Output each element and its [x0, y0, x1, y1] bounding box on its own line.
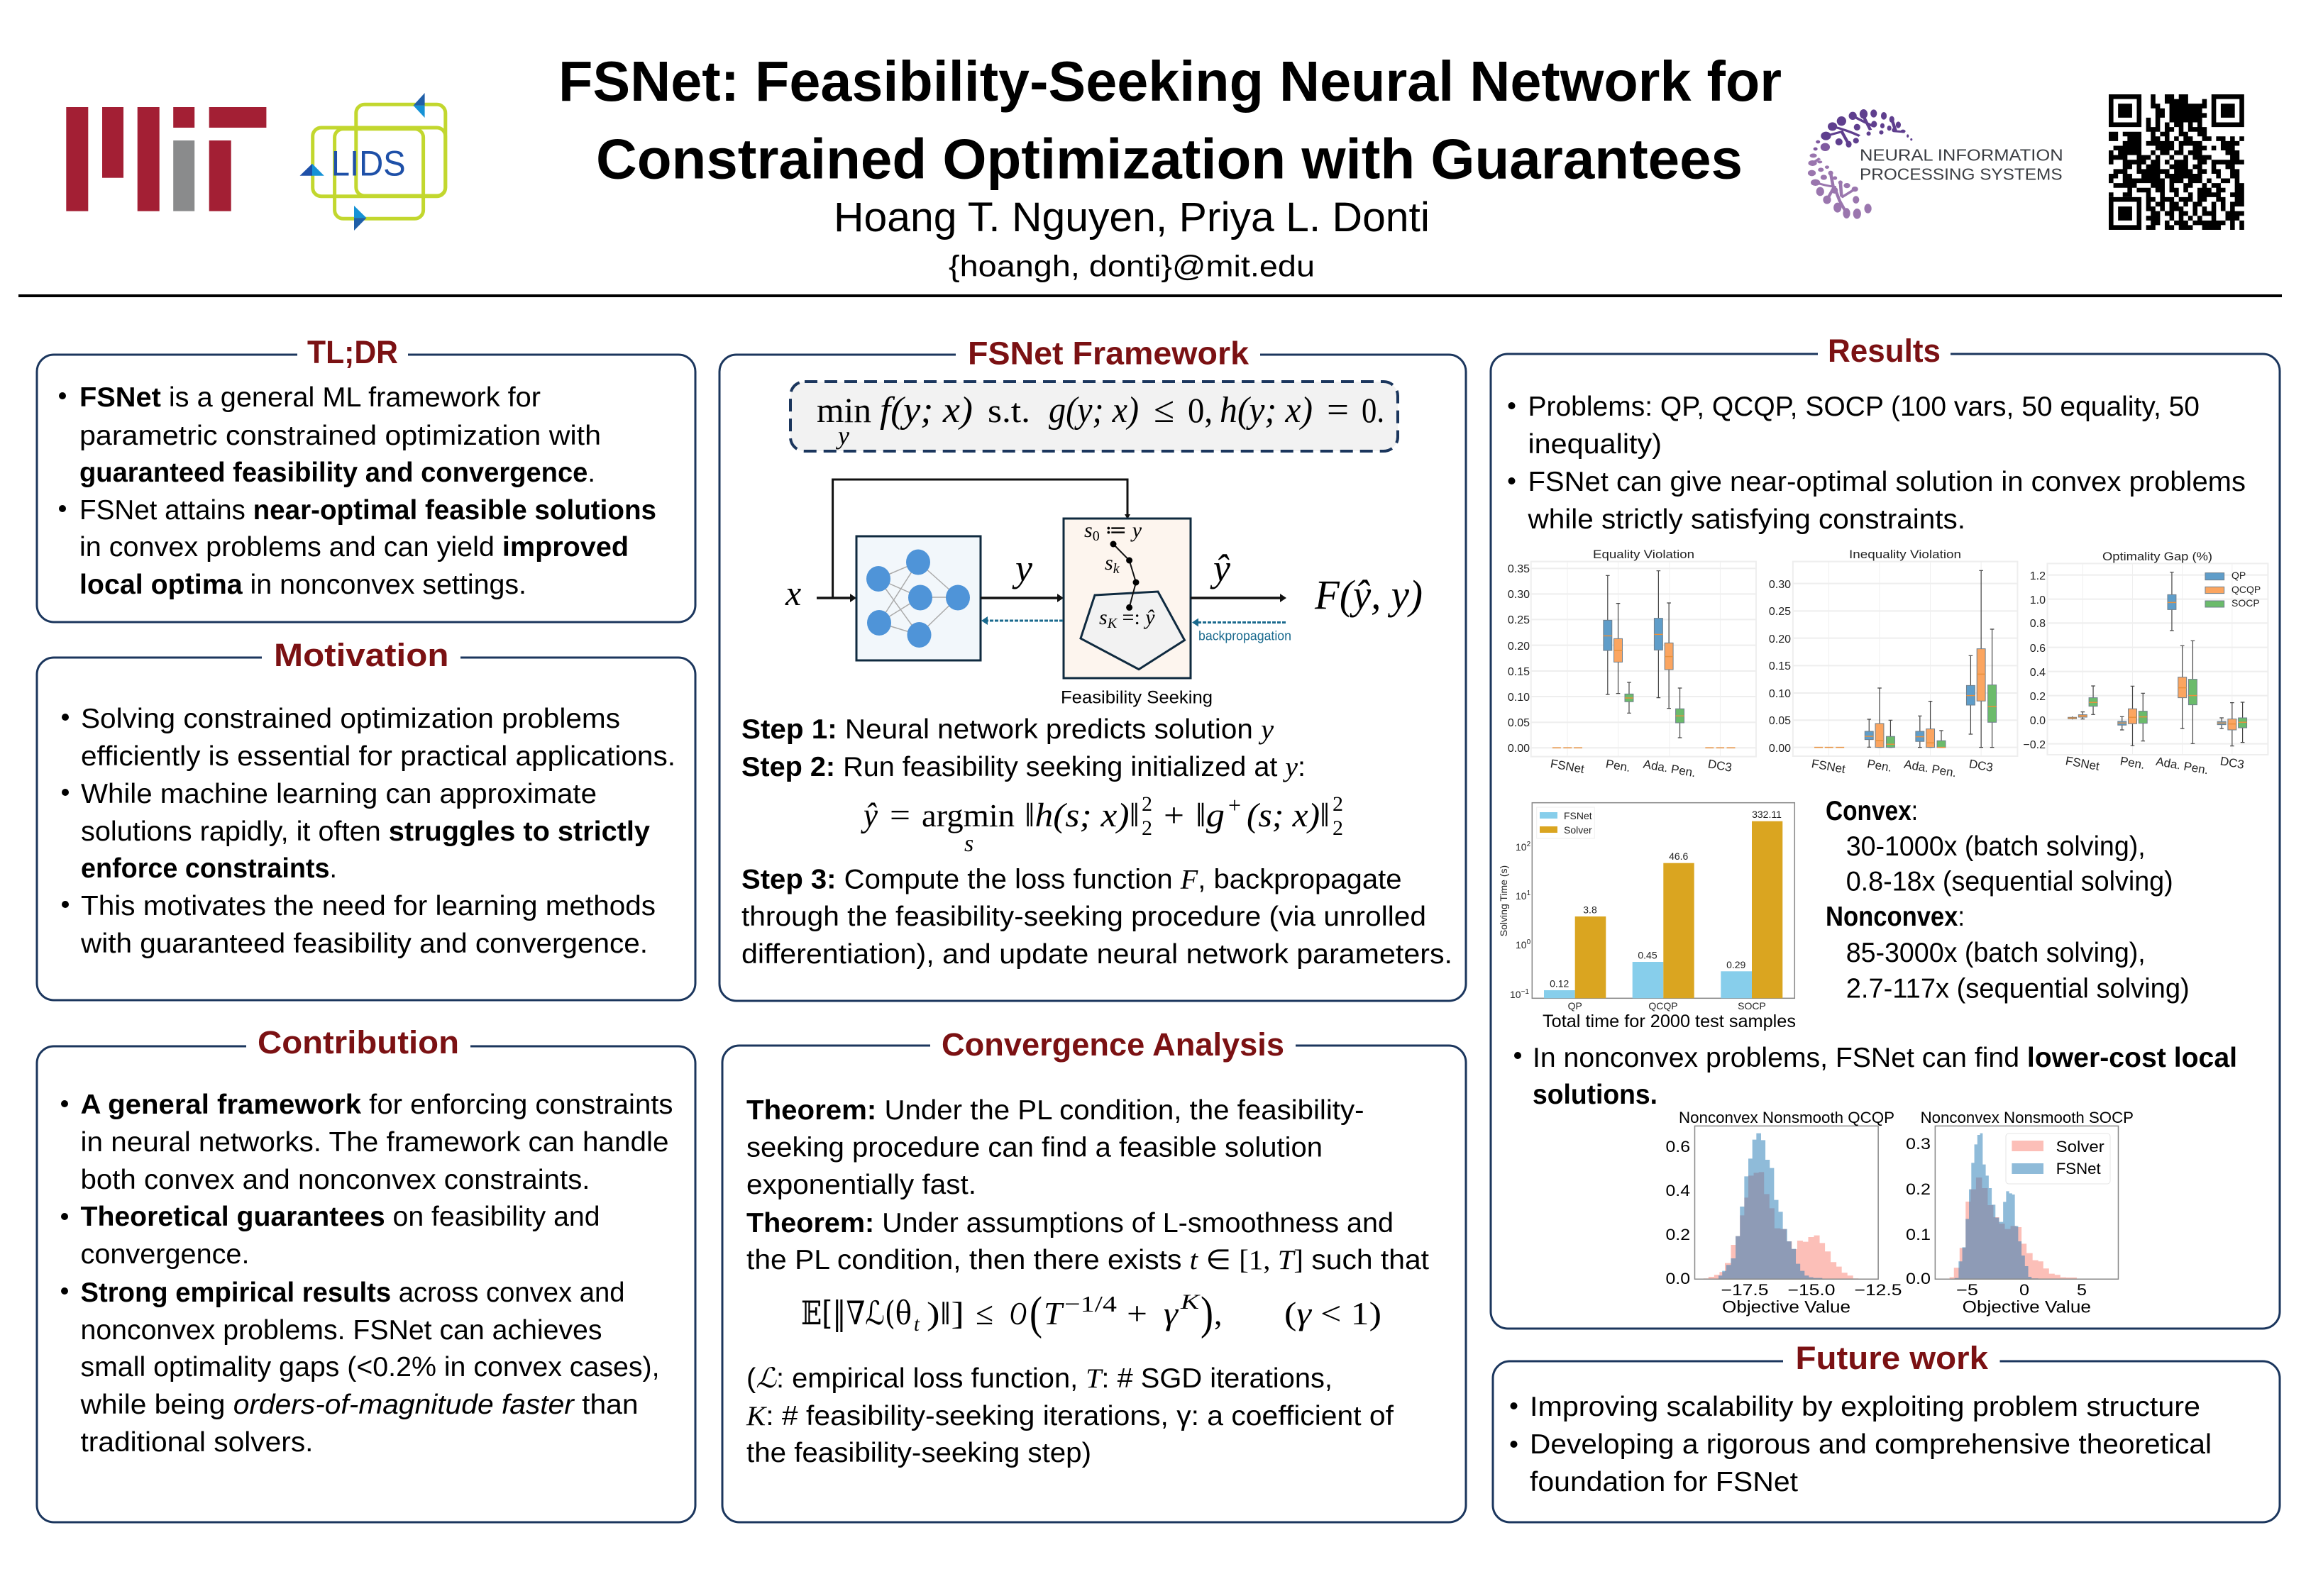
chart: SOCP histogram: −5	[1956, 1281, 1978, 1299]
logo: NeurIPS: PROCESSING SYSTEMS	[1860, 165, 2063, 183]
label: y-hat: ŷ	[1210, 547, 1230, 589]
logo: NeurIPS: NEURAL INFORMATION	[1860, 146, 2063, 165]
chart: SOCP histogram: 5	[2077, 1281, 2087, 1299]
chart: inequality violation box plot: 0.30	[1769, 579, 1791, 591]
chart: optimality gap box plot: 0.2	[2030, 691, 2046, 703]
chart: QCQP histogram: −12.5	[1855, 1281, 1902, 1299]
label: Feasibility Seeking: Feasibility Seeking	[1061, 688, 1213, 708]
formula: convergence bound: 𝔼[‖∇ℒ(θ	[801, 1294, 912, 1332]
arrow: x to network	[817, 594, 856, 602]
logo: MIT	[66, 107, 266, 211]
chart: solving time bar chart: QCQP	[1648, 1000, 1678, 1012]
panel: Contribution	[37, 1024, 695, 1522]
chart: inequality violation box plot: DC3	[1968, 757, 1994, 775]
feasibility seeking box: k	[1113, 561, 1120, 577]
formula: convergence bound: K	[1180, 1290, 1201, 1314]
formula: argmin: 2	[1333, 792, 1343, 816]
feasibility seeking box: ŷ	[1145, 606, 1155, 629]
text: theorems: seeking procedure can find a feasible solution	[746, 1132, 1323, 1163]
chart: optimality gap box plot: 0.6	[2030, 643, 2046, 655]
email: {hoangh, donti}@mit.edu	[949, 250, 1315, 282]
formula: problem statement: ≤	[1154, 390, 1174, 431]
text: speedups: Convex:	[1826, 796, 1918, 826]
chart: inequality violation box plot: 0.15	[1769, 660, 1791, 672]
chart: optimality gap box plot: QP	[2231, 570, 2246, 581]
chart: SOCP histogram	[1906, 1109, 2134, 1317]
text: step 1 and 2: Step 1: Neural network predicts solution y	[741, 714, 1274, 745]
text: Contribution bullets: traditional solvers.	[81, 1427, 314, 1458]
chart: equality violation box plot: 0.15	[1508, 666, 1530, 678]
text: theorems: exponentially fast.	[746, 1170, 976, 1200]
chart: solving time bar chart: 0.45	[1638, 950, 1657, 961]
formula: argmin: ‖h(s; x)‖	[1025, 797, 1140, 834]
feasibility seeking box: s	[1099, 606, 1108, 629]
title: FSNet: Feasibility-Seeking Neural Network for	[558, 50, 1782, 113]
chart: SOCP histogram: 0.2	[1906, 1180, 1931, 1198]
text: nonconvex bullet	[1514, 1043, 2237, 1110]
chart: solving time bar chart: 1	[1527, 890, 1531, 897]
chart: equality violation box plot: Equality Violation	[1593, 548, 1694, 561]
QR code	[2109, 94, 2244, 230]
panel: Convergence Analysis	[722, 1026, 1466, 1522]
chart: equality violation box plot: 0.30	[1508, 589, 1530, 601]
formula: convergence bound: t	[914, 1314, 920, 1336]
chart: QCQP histogram: 0.6	[1666, 1138, 1690, 1156]
diagram: FSNet pipeline	[785, 480, 1423, 708]
panel: TL;DR	[37, 334, 695, 622]
chart: inequality violation box plot: 0.25	[1769, 606, 1791, 618]
text: future work bullets: Developing a rigorous and comprehensive theoretical	[1530, 1429, 2212, 1460]
feasibility seeking box: ≔	[1100, 519, 1132, 542]
formula: convergence bound: O	[1010, 1295, 1027, 1331]
chart: QCQP histogram: −17.5	[1721, 1281, 1768, 1299]
text: speedups: Nonconvex:	[1826, 902, 1965, 932]
chart: solving time bar chart: −1	[1521, 988, 1529, 996]
arrow: backpropagation to network	[981, 616, 1063, 625]
chart: SOCP histogram: 0.0	[1906, 1270, 1931, 1287]
authors: Hoang T. Nguyen, Priya L. Donti	[834, 194, 1430, 240]
text: Contribution bullets	[61, 1090, 673, 1458]
text: speedups: 85-3000x (batch solving),	[1846, 938, 2146, 968]
text: Contribution bullets: both convex and nonconvex constraints.	[81, 1165, 590, 1195]
heading: Results: Results	[1828, 333, 1941, 369]
chart: SOCP histogram: 0.3	[1906, 1135, 1931, 1153]
chart: solving time bar chart: 10	[1516, 939, 1527, 951]
chart: inequality violation box plot: 0.10	[1769, 688, 1791, 700]
chart: SOCP histogram: Objective Value	[1963, 1298, 2091, 1317]
formula: argmin: ‖g	[1196, 797, 1225, 834]
chart: inequality violation box plot: Inequality Violation	[1849, 548, 1961, 561]
text: Motivation bullets: While machine learning can approximate	[81, 779, 597, 809]
formula: argmin: 2	[1142, 816, 1152, 840]
formula: argmin: (s; x)‖	[1247, 797, 1330, 834]
chart: solving time bar chart: Solver	[1564, 824, 1592, 836]
formula: convergence bound: )‖]	[927, 1295, 964, 1331]
formula: convergence bound: )	[1201, 1287, 1213, 1339]
arrow: backpropagation to feasibility	[1192, 619, 1286, 627]
formula: argmin: =	[890, 797, 910, 834]
chart: optimality gap box plot: 0.0	[2030, 715, 2046, 727]
text: Contribution bullets: convergence.	[81, 1239, 250, 1270]
chart: optimality gap box plot: Ada. Pen.	[2155, 755, 2210, 777]
label: backpropagation: backpropagation	[1198, 628, 1291, 643]
formula: argmin: argmin	[922, 797, 1015, 833]
formula: problem statement: 0,	[1188, 390, 1213, 430]
text: notation: K: # feasibility-seeking iterations, γ: a coefficient of	[746, 1401, 1394, 1431]
chart: equality violation box plot: 0.20	[1508, 641, 1530, 653]
chart: inequality violation box plot	[1769, 548, 2017, 780]
formula: argmin: s	[964, 831, 973, 857]
chart: optimality gap box plot: 1.0	[2030, 594, 2046, 606]
text: Contribution bullets: Strong empirical results across convex and	[81, 1278, 624, 1308]
text: speedups: 30-1000x (batch solving),	[1846, 831, 2146, 862]
formula: convergence bound: (	[1030, 1287, 1042, 1339]
chart: optimality gap box plot: FSNet	[2065, 754, 2101, 773]
text: Motivation bullets: with guaranteed feasibility and convergence.	[80, 929, 648, 959]
text: theorems: Theorem: Under the PL condition, the feasibility-	[746, 1095, 1364, 1126]
chart: solving time bar chart: QP	[1568, 1000, 1582, 1012]
formula: convergence bound: γ	[1164, 1295, 1179, 1331]
chart: optimality gap box plot: −0.2	[2023, 739, 2046, 751]
text: Motivation bullets: enforce constraints.	[81, 853, 337, 884]
chart: solving time bar chart: 2	[1527, 841, 1531, 848]
text: step 3	[741, 864, 1452, 970]
formula: convergence bound	[801, 1287, 1381, 1339]
chart: inequality violation box plot: Ada. Pen.	[1903, 758, 1958, 780]
chart: SOCP histogram: 0	[2019, 1281, 2029, 1299]
text: Motivation bullets: solutions rapidly, it often struggles to strictly	[81, 816, 650, 847]
chart: optimality gap box plot: QCQP	[2231, 584, 2261, 595]
chart: equality violation box plot: DC3	[1707, 757, 1733, 775]
heading: Convergence Analysis: Convergence Analysis	[942, 1026, 1284, 1063]
formula: argmin	[860, 792, 1343, 857]
chart: inequality violation box plot: Pen.	[1866, 757, 1893, 775]
text: Contribution bullets: small optimality gaps (<0.2% in convex cases),	[81, 1352, 659, 1382]
neural network box	[856, 536, 981, 660]
formula: convergence bound: (γ < 1)	[1284, 1295, 1381, 1331]
chart: QCQP histogram: 0.0	[1666, 1270, 1690, 1287]
formula: convergence bound: T	[1044, 1295, 1064, 1331]
logo: NeurIPS	[1808, 109, 2063, 219]
text: results intro: inequality)	[1528, 429, 1662, 460]
text: TL;DR bullets: guaranteed feasibility and convergence.	[79, 458, 595, 488]
formula: argmin: 2	[1142, 792, 1152, 816]
formula: problem statement: s.t.	[988, 392, 1030, 430]
text: TL;DR bullets	[59, 382, 656, 600]
title	[558, 50, 1782, 191]
formula: convergence bound: ≤	[976, 1295, 993, 1331]
text: Motivation bullets	[62, 704, 675, 959]
text: results intro: FSNet can give near-optimal solution in convex problems	[1528, 467, 2246, 497]
text: step 3: through the feasibility-seeking procedure (via unrolled	[741, 902, 1426, 932]
label: F: F(ŷ, y)	[1314, 572, 1423, 618]
feasibility seeking box: s	[1105, 551, 1113, 575]
text: Motivation bullets: This motivates the need for learning methods	[81, 891, 656, 921]
chart: solving time bar chart: 46.6	[1669, 850, 1689, 862]
heading: Contribution: Contribution	[258, 1024, 459, 1060]
heading: Future work: Future work	[1795, 1340, 1989, 1376]
chart: SOCP histogram: 0.1	[1906, 1226, 1931, 1243]
chart: equality violation box plot: 0.35	[1508, 563, 1530, 575]
chart: optimality gap box plot	[2023, 550, 2268, 777]
text: future work bullets: foundation for FSNet	[1530, 1467, 1798, 1497]
chart: SOCP histogram: Nonconvex Nonsmooth SOCP	[1921, 1109, 2134, 1126]
formula: problem statement: h(y; x)	[1220, 390, 1313, 431]
chart: optimality gap box plot: 1.2	[2030, 570, 2046, 582]
formula: argmin: +	[1164, 797, 1184, 834]
chart: optimality gap box plot: Pen.	[2119, 754, 2146, 772]
text: Contribution bullets: while being orders-of-magnitude faster than	[79, 1390, 639, 1420]
text: TL;DR bullets: local optima in nonconvex settings.	[79, 570, 526, 600]
logo: LIDS	[299, 93, 446, 231]
heading: TL;DR: TL;DR	[307, 334, 398, 370]
text: results intro: while strictly satisfying constraints.	[1527, 504, 1965, 535]
chart: equality violation box plot: 0.00	[1508, 743, 1530, 755]
chart: solving time bar chart: 10	[1510, 989, 1521, 1000]
chart: QCQP histogram: Objective Value	[1722, 1298, 1850, 1317]
text: results intro	[1508, 392, 2246, 535]
formula: problem statement	[790, 382, 1398, 451]
formula: problem statement: f(y; x)	[880, 390, 973, 431]
text: Contribution bullets: in neural networks. The framework can handle	[81, 1127, 668, 1158]
chart: QCQP histogram: Nonconvex Nonsmooth QCQP	[1679, 1109, 1894, 1126]
feasibility seeking box: =:	[1117, 606, 1145, 629]
feasibility seeking box: s	[1084, 519, 1093, 542]
text: TL;DR bullets: in convex problems and can yield improved	[79, 532, 629, 563]
chart: equality violation box plot: Pen.	[1605, 757, 1631, 775]
chart: equality violation box plot	[1508, 548, 1756, 780]
chart: equality violation box plot: 0.10	[1508, 692, 1530, 704]
chart: SOCP histogram: FSNet	[2056, 1160, 2101, 1177]
text: step 3: Step 3: Compute the loss function F, backpropagate	[741, 864, 1402, 895]
chart: QCQP histogram: 0.2	[1666, 1226, 1690, 1243]
text: theorems: the PL condition, then there exists t ∈ [1, T] such that	[746, 1245, 1429, 1275]
arrow: y-hat	[1191, 594, 1286, 602]
panel: FSNet Framework	[719, 335, 1466, 1001]
text: notation: the feasibility-seeking step)	[746, 1438, 1091, 1468]
formula: argmin: 2	[1333, 816, 1343, 840]
chart: optimality gap box plot: DC3	[2219, 754, 2245, 772]
chart: solving time bar chart: 3.8	[1583, 904, 1597, 916]
formula: problem statement: =	[1327, 390, 1349, 431]
chart: optimality gap box plot: Optimality Gap (%)	[2102, 550, 2212, 563]
chart: solving time bar chart: Total time for 2000 test samples	[1543, 1012, 1796, 1031]
chart: inequality violation box plot: 0.05	[1769, 715, 1791, 727]
text: Contribution bullets: A general framework for enforcing constraints	[81, 1090, 673, 1120]
chart: QCQP histogram: 0.4	[1666, 1182, 1690, 1199]
chart: QCQP histogram	[1666, 1109, 1902, 1317]
formula: convergence bound: −1/4	[1064, 1291, 1117, 1317]
text: results intro: Problems: QP, QCQP, SOCP (100 vars, 50 equality, 50	[1528, 392, 2200, 422]
text: theorems	[746, 1095, 1429, 1275]
formula: argmin: +	[1228, 792, 1241, 818]
text: step 3: differentiation), and update neural network parameters.	[741, 939, 1452, 970]
feasibility seeking box: y	[1132, 519, 1142, 542]
chart: solving time bar chart: 0.29	[1726, 959, 1746, 970]
panel: Motivation	[37, 637, 695, 1000]
arrow: skip connection	[833, 480, 1130, 598]
chart: inequality violation box plot: 0.20	[1769, 633, 1791, 645]
text: speedups: 2.7-117x (sequential solving)	[1846, 974, 2190, 1004]
chart: optimality gap box plot: 0.8	[2030, 618, 2046, 630]
text: speedups: 0.8-18x (sequential solving)	[1846, 867, 2173, 897]
text: theorems: Theorem: Under assumptions of L-smoothness and	[746, 1208, 1394, 1238]
text: Motivation bullets: Solving constrained optimization problems	[81, 704, 620, 734]
text: TL;DR bullets: parametric constrained optimization with	[79, 421, 601, 451]
chart: equality violation box plot: 0.25	[1508, 614, 1530, 626]
logo: LIDS: LIDS	[331, 143, 406, 183]
text: nonconvex bullet: In nonconvex problems, FSNet can find lower-cost local	[1533, 1043, 2237, 1073]
chart: equality violation box plot: Ada. Pen.	[1642, 758, 1697, 780]
chart: solving time bar chart: SOCP	[1738, 1000, 1766, 1012]
chart: optimality gap box plot: SOCP	[2231, 597, 2260, 609]
arrow: y	[981, 594, 1064, 602]
feasibility seeking box: K	[1107, 616, 1118, 631]
panel: Future work	[1493, 1340, 2280, 1522]
chart: solving time bar chart: 0.12	[1550, 978, 1569, 990]
heading: FSNet Framework: FSNet Framework	[968, 335, 1249, 372]
text: Contribution bullets: nonconvex problems. FSNet can achieves	[81, 1315, 602, 1346]
formula: problem statement: g(y; x)	[1049, 390, 1139, 431]
panel: Results	[1491, 333, 2280, 1329]
text: Motivation bullets: efficiently is essential for practical applications.	[81, 741, 675, 772]
label: x: x	[785, 573, 801, 613]
chart: solving time bar chart	[1498, 803, 1796, 1031]
chart: equality violation box plot: 0.05	[1508, 717, 1530, 729]
heading: Motivation: Motivation	[274, 637, 448, 673]
text: step 1 and 2	[741, 714, 1306, 782]
feasibility seeking box: 0	[1093, 528, 1100, 544]
text: TL;DR bullets: FSNet is a general ML framework for	[79, 382, 541, 413]
chart: solving time bar chart: 10	[1516, 890, 1527, 902]
chart: solving time bar chart: 332.11	[1752, 809, 1782, 820]
text: future work bullets: Improving scalability by exploiting problem structure	[1530, 1392, 2200, 1422]
formula: argmin: ŷ	[860, 797, 878, 834]
formula: convergence bound: +	[1127, 1295, 1147, 1331]
text: notation: (ℒ: empirical loss function, T: # SGD iterations,	[746, 1363, 1333, 1395]
text: TL;DR bullets: FSNet attains near-optimal feasible solutions	[79, 495, 656, 526]
chart: solving time bar chart: Solving Time (s)	[1498, 865, 1509, 936]
chart: optimality gap box plot: 0.4	[2030, 667, 2046, 679]
formula: problem statement: 0.	[1362, 390, 1384, 430]
chart: equality violation box plot: FSNet	[1550, 757, 1586, 776]
text: Contribution bullets: Theoretical guarantees on feasibility and	[81, 1202, 600, 1232]
chart: inequality violation box plot: FSNet	[1811, 757, 1847, 776]
title: Constrained Optimization with Guarantees	[596, 128, 1743, 191]
text: notation	[746, 1363, 1394, 1468]
formula: problem statement: y	[836, 421, 849, 450]
chart: QCQP histogram: −15.0	[1788, 1281, 1835, 1299]
chart: inequality violation box plot: 0.00	[1769, 743, 1791, 755]
text: speedups	[1826, 796, 2190, 1004]
text: future work bullets	[1510, 1392, 2212, 1497]
feasibility seeking box	[1064, 519, 1191, 678]
chart: solving time bar chart: 0	[1527, 938, 1531, 946]
text: step 1 and 2: Step 2: Run feasibility seeking initialized at y:	[741, 752, 1306, 782]
label: y: y	[1012, 547, 1032, 589]
chart: SOCP histogram: Solver	[2056, 1138, 2104, 1156]
chart: solving time bar chart: 10	[1516, 841, 1527, 853]
formula: problem statement: min	[817, 390, 871, 430]
formula: convergence bound: ,	[1214, 1295, 1222, 1331]
chart: solving time bar chart: FSNet	[1564, 810, 1592, 821]
text: nonconvex bullet: solutions.	[1533, 1080, 1657, 1110]
